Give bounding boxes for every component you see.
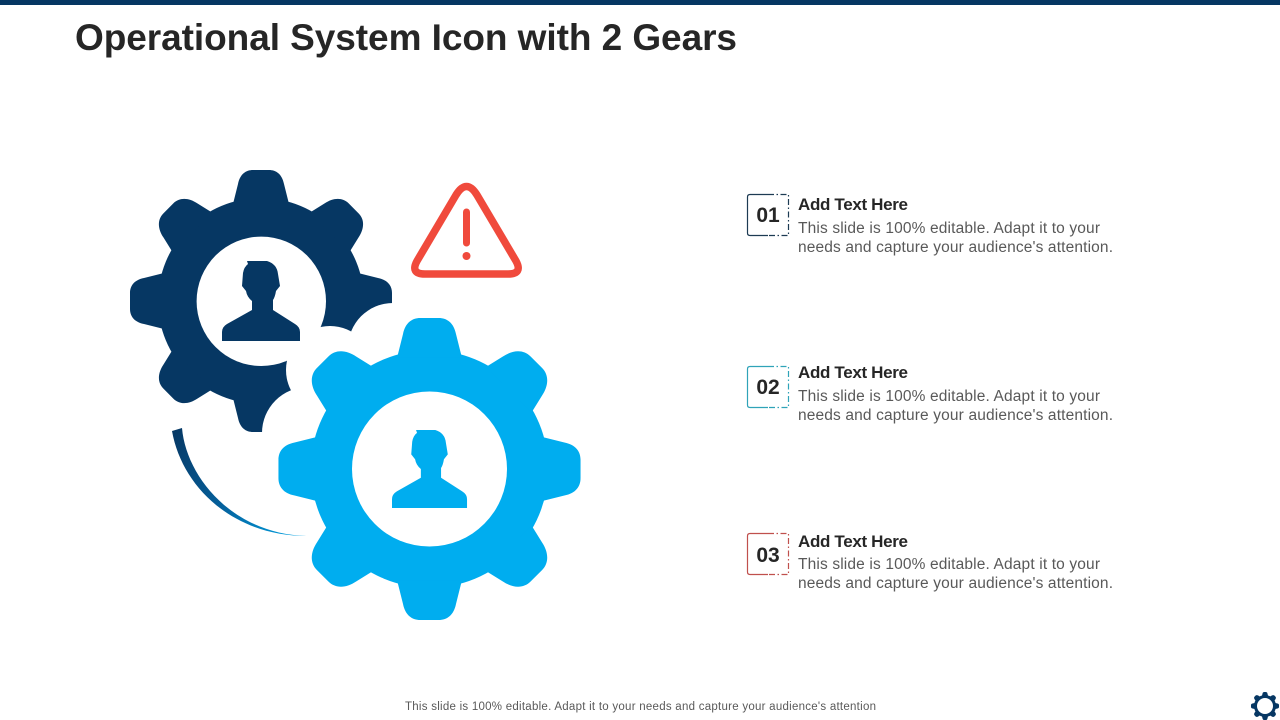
top bar <box>0 0 1280 5</box>
number box 02 <box>748 366 788 408</box>
body text 02: This slide is 100% editable. Adapt it to your <box>798 388 1100 405</box>
icon: settings gear <box>1251 692 1279 720</box>
heading 02: Add Text Here <box>798 363 908 382</box>
body text 01: needs and capture your audience's attention. <box>798 239 1113 256</box>
heading 01: Add Text Here <box>798 195 908 214</box>
body text 01: This slide is 100% editable. Adapt it to your <box>798 220 1100 237</box>
body text 02 <box>798 388 1113 424</box>
item 02 <box>748 363 1113 424</box>
number 03: 03 <box>756 544 780 567</box>
icon: light blue gear <box>278 318 581 620</box>
icon: dark navy gear <box>130 170 438 479</box>
body text 02: needs and capture your audience's attention. <box>798 407 1113 424</box>
body text 03: needs and capture your audience's attention. <box>798 575 1113 592</box>
number box 01 <box>748 194 788 236</box>
body text 03 <box>798 556 1113 592</box>
number 01: 01 <box>756 204 780 227</box>
icon: two gears illustration <box>130 170 581 620</box>
number 02: 02 <box>756 376 780 399</box>
body text 03: This slide is 100% editable. Adapt it to your <box>798 556 1100 573</box>
arrow: curved connector <box>172 428 307 536</box>
body text 01 <box>798 220 1113 256</box>
footer text: This slide is 100% editable. Adapt it to your needs and capture your audience's attention <box>405 701 876 713</box>
item 01 <box>748 194 1113 256</box>
icon: warning triangle <box>415 186 518 274</box>
number box 03 <box>748 534 788 574</box>
title: Operational System Icon with 2 Gears <box>75 17 737 58</box>
item 03 <box>748 532 1113 592</box>
heading 03: Add Text Here <box>798 532 908 551</box>
